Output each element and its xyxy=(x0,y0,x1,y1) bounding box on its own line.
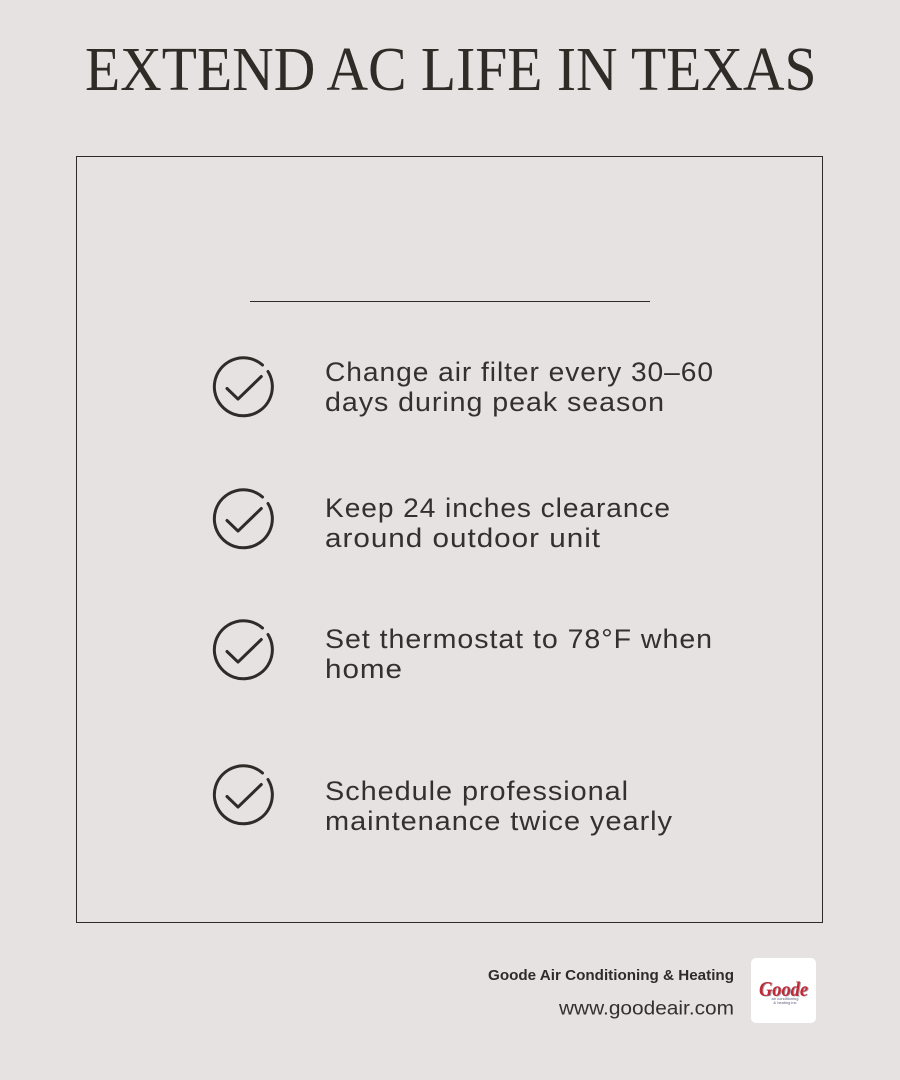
tip 4: maintenance xyxy=(214,766,673,836)
tip 4 text xyxy=(325,776,673,836)
company name: Goode Air Conditioning & Heating xyxy=(488,968,734,984)
icon: check circle xyxy=(214,358,272,416)
tip 4 text: Schedule professional xyxy=(325,776,629,806)
logo xyxy=(751,958,816,1023)
tip 2 text xyxy=(325,493,671,553)
title: EXTEND AC LIFE IN TEXAS xyxy=(85,35,817,103)
website: www.goodeair.com xyxy=(558,998,734,1020)
logo: Goode xyxy=(760,978,809,1002)
tip 3 text: Set thermostat to 78°F when xyxy=(325,624,713,654)
logo: Goode xyxy=(759,977,808,1001)
panel: tips frame xyxy=(76,156,822,922)
tip 3 text xyxy=(325,624,713,684)
tip 2 text: Keep 24 inches clearance xyxy=(325,493,671,523)
tip 2 text: around outdoor unit xyxy=(325,523,601,553)
tip 1: air filter xyxy=(214,357,714,417)
tip 4 text: maintenance twice yearly xyxy=(325,806,673,836)
tip 1 text: days during peak season xyxy=(325,387,665,417)
tip 3: thermostat xyxy=(214,621,713,684)
tip 3 text: home xyxy=(325,654,403,684)
logo: air conditioning xyxy=(772,996,798,1001)
icon: check circle xyxy=(214,621,272,679)
logo: & heating inc xyxy=(773,1000,797,1005)
tip 1 text: Change air filter every 30–60 xyxy=(325,357,714,387)
tip 2: clearance xyxy=(214,490,671,553)
icon: check circle xyxy=(214,490,272,548)
icon: check circle xyxy=(214,766,272,824)
tip 1 text xyxy=(325,357,714,417)
